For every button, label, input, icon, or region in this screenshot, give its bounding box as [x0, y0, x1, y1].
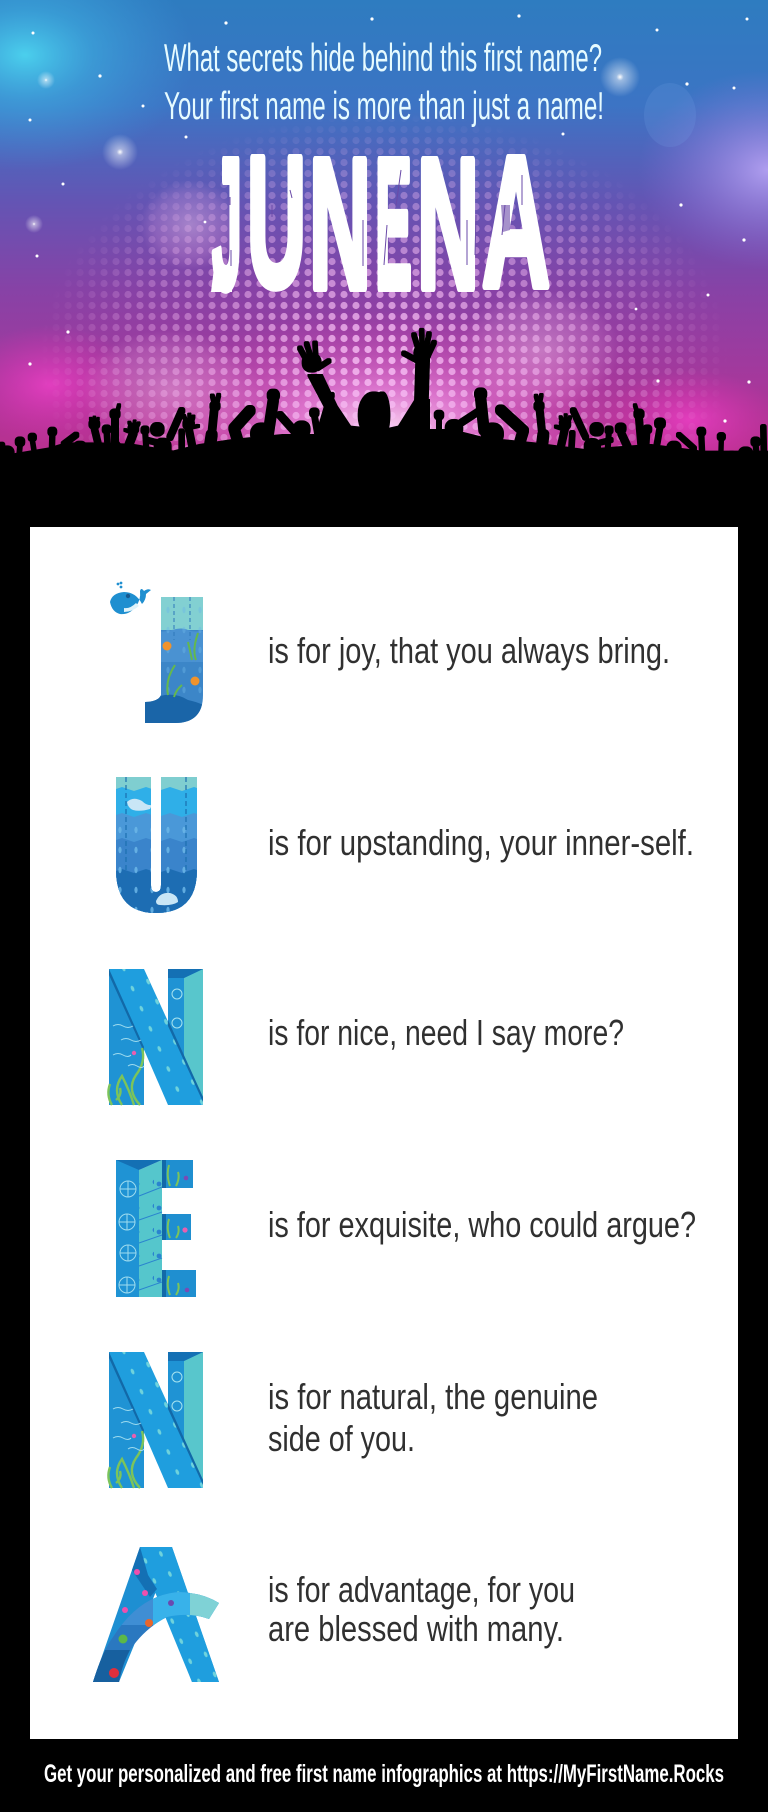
- letter icon: second N: [108, 1352, 203, 1488]
- title: JUNENA: N: [417, 121, 479, 328]
- title: JUNENA: N: [309, 121, 371, 328]
- text: second N lines: is for natural, the genuine: [268, 1376, 598, 1417]
- text: A lines: is for advantage, for you: [268, 1569, 575, 1610]
- title: JUNENA: A: [482, 119, 550, 326]
- text: second N lines: [268, 1376, 598, 1459]
- text: N line: is for nice, need I say more?: [268, 1012, 624, 1053]
- title: JUNENA: E: [375, 121, 412, 328]
- title: JUNENA: [211, 119, 550, 328]
- letter icon: A: [90, 1547, 225, 1685]
- title: JUNENA: J: [212, 121, 242, 328]
- text: J line: is for joy, that you always bring.: [268, 630, 670, 671]
- text: A lines: are blessed with many.: [268, 1608, 564, 1649]
- letter icon: E: [116, 1160, 196, 1297]
- letter icon: J with whale: [110, 582, 210, 727]
- text: second N lines: side of you.: [268, 1418, 415, 1459]
- letter icon: N: [108, 969, 203, 1105]
- crowd silhouette: [0, 331, 768, 528]
- title: JUNENA: U: [247, 119, 306, 326]
- sparkling stars: [25, 14, 751, 423]
- letter icon: U with whales: [116, 777, 197, 913]
- header background: [0, 0, 768, 454]
- text: A lines: [268, 1569, 575, 1649]
- heading: two intro lines: [164, 37, 604, 128]
- white panel: [30, 527, 738, 1739]
